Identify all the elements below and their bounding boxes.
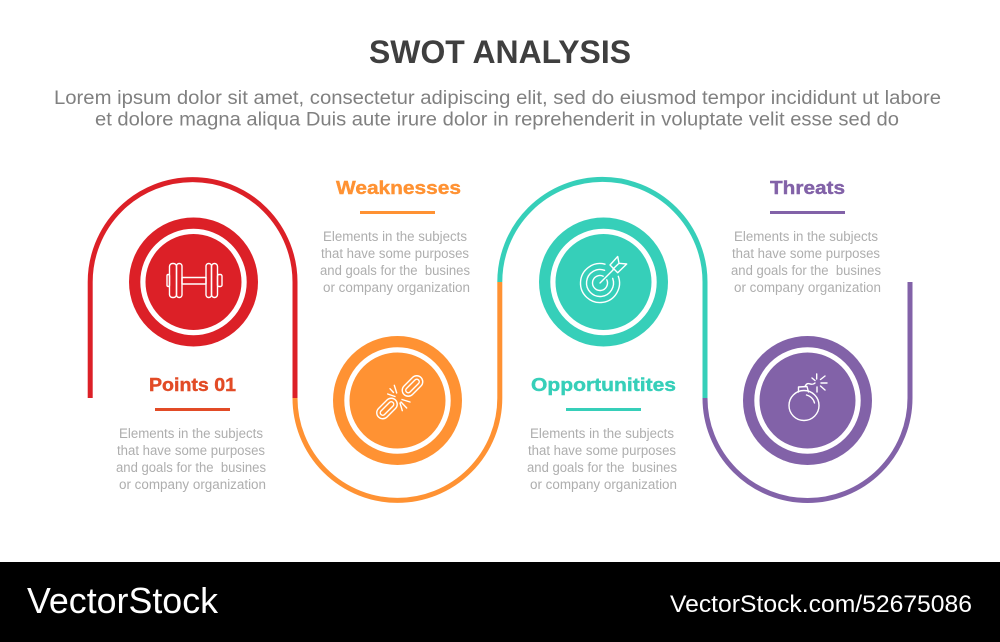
body text: or company organization: [530, 477, 677, 492]
subtitle text: Lorem ipsum dolor sit amet, consectetur adipiscing elit, sed do eiusmod tempor incididunt ut labore: [54, 88, 941, 109]
body text: [116, 426, 266, 492]
body text: that have some purposes: [528, 443, 676, 458]
heading: threats: Threats: [770, 177, 845, 198]
heading: weaknesses: Weaknesses: [336, 177, 461, 198]
body text: that have some purposes: [321, 246, 469, 261]
heading: points 01: Points 01: [149, 374, 236, 395]
body text: that have some purposes: [732, 246, 880, 261]
panel: opportunities: [527, 218, 677, 492]
panel: weaknesses: [320, 177, 470, 465]
body text: or company organization: [734, 280, 881, 295]
body text: Elements in the subjects: [323, 229, 467, 244]
body text: that have some purposes: [117, 443, 265, 458]
icon: bomb: [789, 374, 827, 420]
body text: Elements in the subjects: [530, 426, 674, 441]
subtitle text: et dolore magna aliqua Duis aute irure dolor in reprehenderit in voluptate velit esse sed do: [95, 110, 899, 130]
body text: or company organization: [323, 280, 470, 295]
icon: dumbbell: [167, 264, 222, 298]
body text: Elements in the subjects: [734, 229, 878, 244]
footer band: [0, 562, 1000, 642]
subtitle text: [54, 88, 941, 130]
panel: points 01: [116, 218, 266, 492]
winding timeline path: [90, 179, 910, 500]
footer url text: VectorStock.com/52675086: [670, 591, 972, 618]
body text: Elements in the subjects: [119, 426, 263, 441]
underline: [155, 408, 230, 411]
badge: orange circle: [333, 336, 462, 465]
heading: opportunitites: Opportunitites: [531, 374, 676, 395]
body text: and goals for the busines: [320, 263, 470, 278]
footer logo text: VectorStock: [27, 580, 219, 621]
underline: [360, 211, 435, 214]
badge: purple circle: [743, 336, 872, 465]
badge: red circle: [129, 218, 258, 346]
underline: [566, 408, 641, 411]
body text: or company organization: [119, 477, 266, 492]
body text: and goals for the busines: [527, 460, 677, 475]
body text: and goals for the busines: [731, 263, 881, 278]
title: SWOT ANALYSIS: [369, 34, 631, 70]
body text: [320, 229, 470, 295]
body text: [527, 426, 677, 492]
panel: threats: [731, 177, 881, 465]
body text: [731, 229, 881, 295]
icon: broken chain: [374, 373, 425, 421]
body text: and goals for the busines: [116, 460, 266, 475]
badge: teal circle: [539, 218, 668, 346]
underline: [770, 211, 845, 214]
icon: target with arrow: [581, 256, 627, 303]
